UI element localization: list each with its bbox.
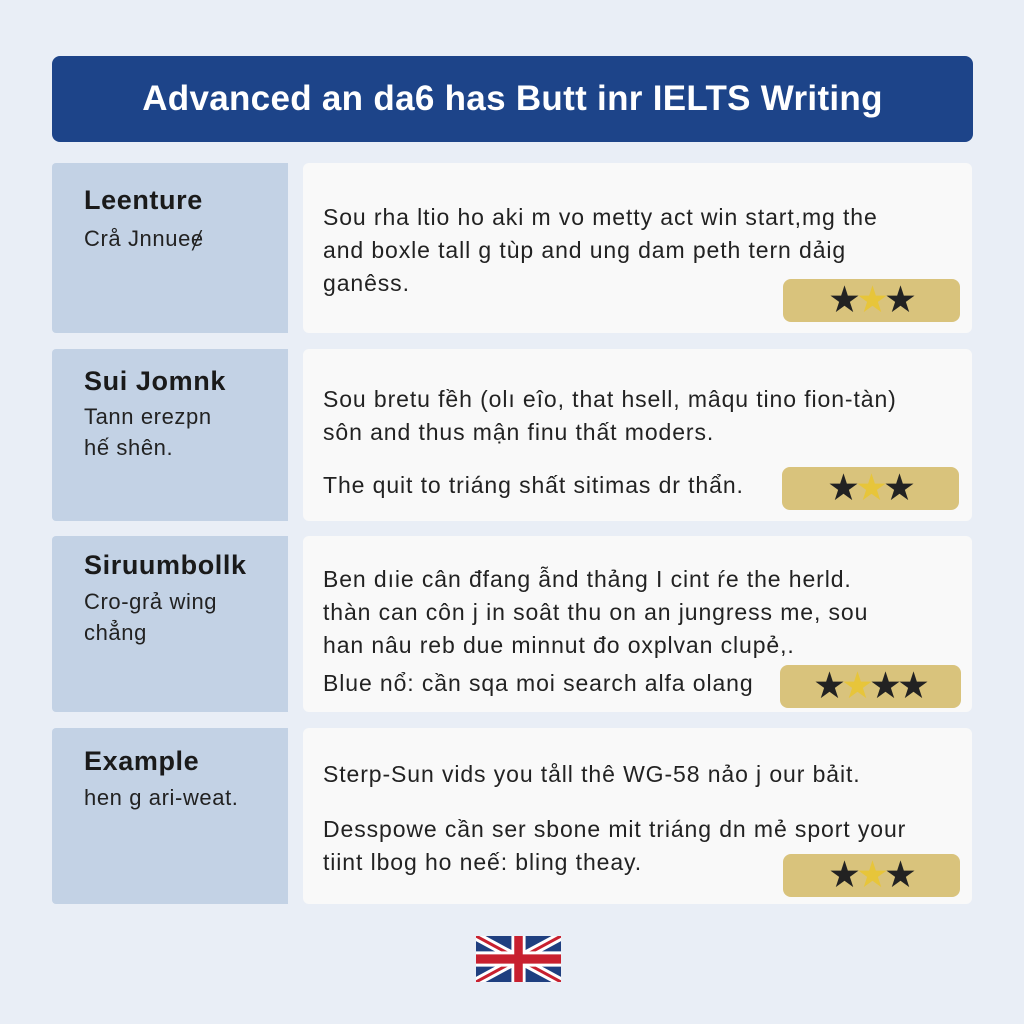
label subtext: Tann erezpn <box>84 404 212 429</box>
label subtext: chẳng <box>84 620 147 645</box>
text block: Sou rha ltio ho aki m vo metty act win start,mg the <box>323 204 878 230</box>
label heading: Leenture <box>84 185 203 215</box>
title <box>52 56 973 142</box>
text block: Sterp-Sun vids you tåll thê WG-58 nảo j our bảit. <box>323 761 861 787</box>
label heading: Example <box>84 746 199 776</box>
text block: ganêss. <box>323 270 410 296</box>
text block <box>323 386 897 445</box>
panel: row 3 label <box>52 536 288 712</box>
label subtext <box>84 589 217 645</box>
star rating badge <box>783 279 960 322</box>
panel: row 3 content <box>303 536 972 712</box>
text block <box>323 566 868 658</box>
text block <box>323 204 878 296</box>
title: Advanced an da6 has Butt inr IELTS Writing <box>142 79 883 118</box>
text block: thàn can côn j in soât thu on an jungress me, sou <box>323 599 868 625</box>
label subtext: hế shên. <box>84 435 173 460</box>
panel: row 1 content <box>303 163 972 333</box>
star rating badge: ★★★ <box>830 284 914 317</box>
label subtext <box>84 404 212 460</box>
label subtext: Crå Jnnueɇ <box>84 226 204 251</box>
text block: Sou bretu fềh (olı eîo, that hsell, mâqu tino fion-tàn) <box>323 386 897 412</box>
icon: UK flag <box>476 936 561 982</box>
label heading: Siruumbollk <box>84 550 247 580</box>
text line: The quit to triáng shất sitimas dr thẩn. <box>323 472 744 498</box>
star rating badge <box>783 854 960 897</box>
label heading: Sui Jomnk <box>84 366 226 396</box>
label subtext: Cro-grả wing <box>84 589 217 614</box>
panel: row 2 label <box>52 349 288 521</box>
star rating badge: ★★★ <box>828 472 912 505</box>
text block: tiint lbog ho neế: bling theay. <box>323 849 642 875</box>
panel: row 2 content <box>303 349 972 521</box>
text block: sôn and thus mận finu thất moders. <box>323 419 714 445</box>
label subtext: hen g ari-weat. <box>84 785 239 810</box>
text block: han nâu reb due minnut đo oxplvan clupẻ,. <box>323 632 795 658</box>
text block: and boxle tall g tùp and ung dam peth tern dảig <box>323 237 846 263</box>
text block <box>323 816 906 875</box>
panel: row 4 content <box>303 728 972 904</box>
star rating badge: ★★★★ <box>814 670 926 703</box>
text line: Blue nổ: cần sqa moi search alfa olang <box>323 670 754 696</box>
star rating badge <box>782 467 959 510</box>
text block: Ben dıie cân đfang ẫnd thảng I cint ŕe the herld. <box>323 566 852 592</box>
star rating badge: ★★★ <box>830 859 914 892</box>
panel: row 4 label <box>52 728 288 904</box>
star rating badge <box>780 665 961 708</box>
text block: Desspowe cần ser sbone mit triáng dn mẻ sport your <box>323 816 906 842</box>
panel: row 1 label <box>52 163 288 333</box>
